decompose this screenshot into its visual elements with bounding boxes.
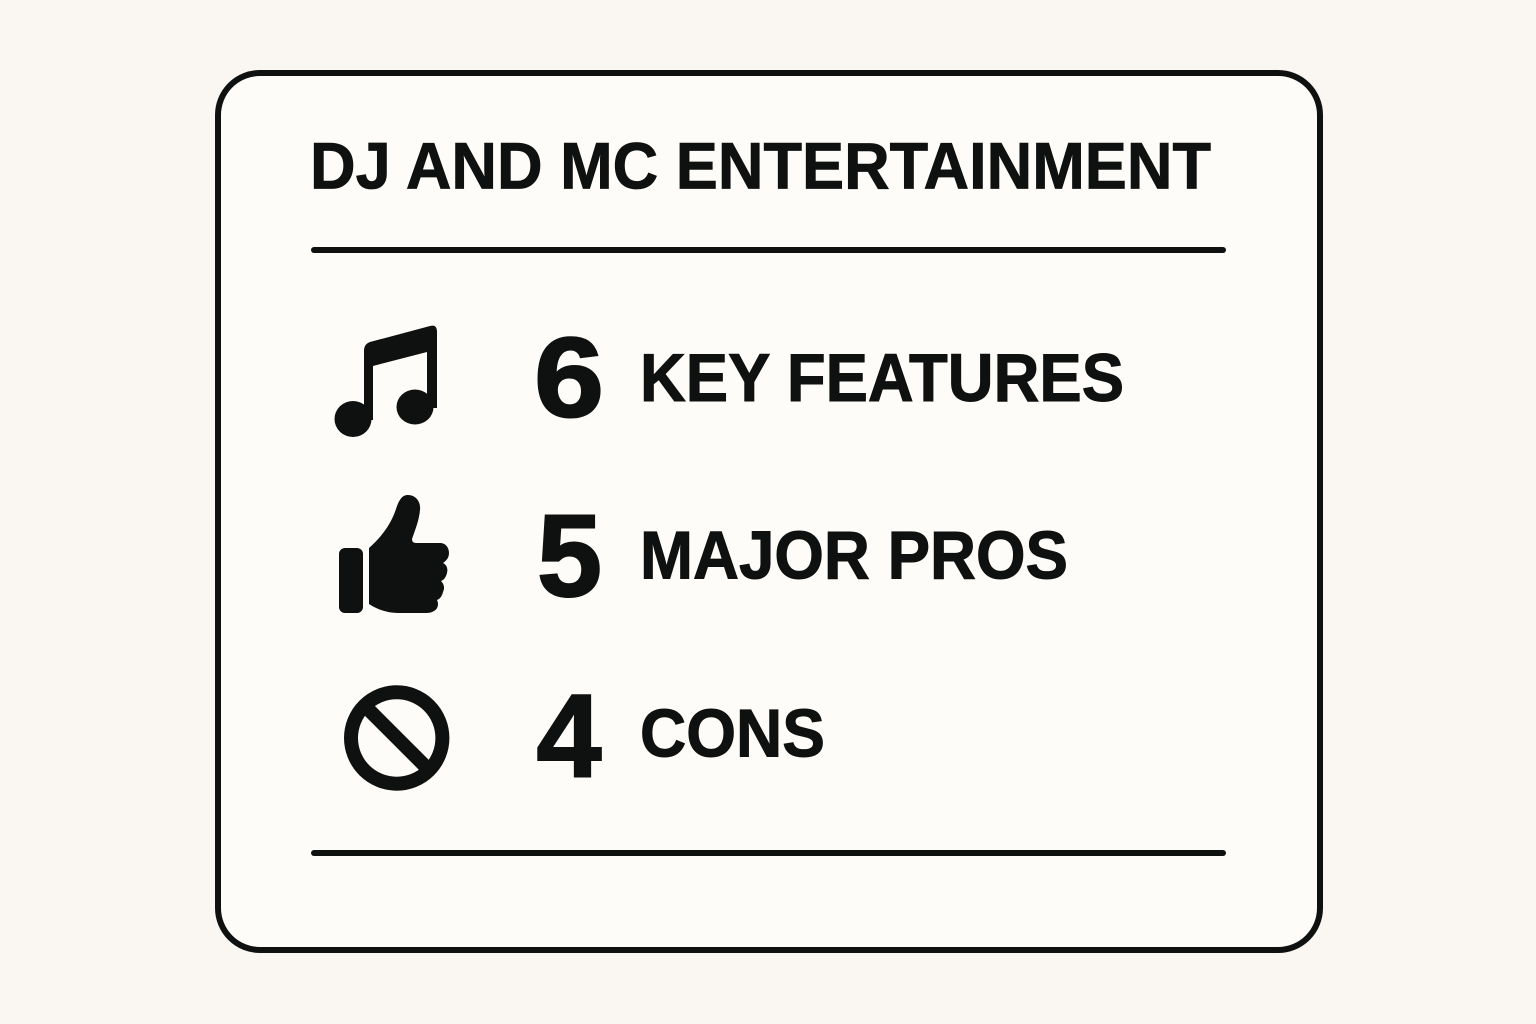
icon: music note [334, 326, 437, 437]
label: key features: KEY FEATURES [640, 340, 1124, 416]
label: cons: CONS [640, 696, 825, 772]
stat: 6: 6 [534, 314, 604, 440]
panel: card [218, 73, 1320, 950]
label: major pros: MAJOR PROS [640, 518, 1068, 594]
icon: thumbs up [339, 495, 449, 613]
icon: prohibited sign [351, 692, 442, 784]
title: DJ AND MC ENTERTAINMENT [310, 128, 1211, 202]
stat: 4: 4 [536, 670, 602, 802]
stat: 5: 5 [537, 490, 602, 621]
